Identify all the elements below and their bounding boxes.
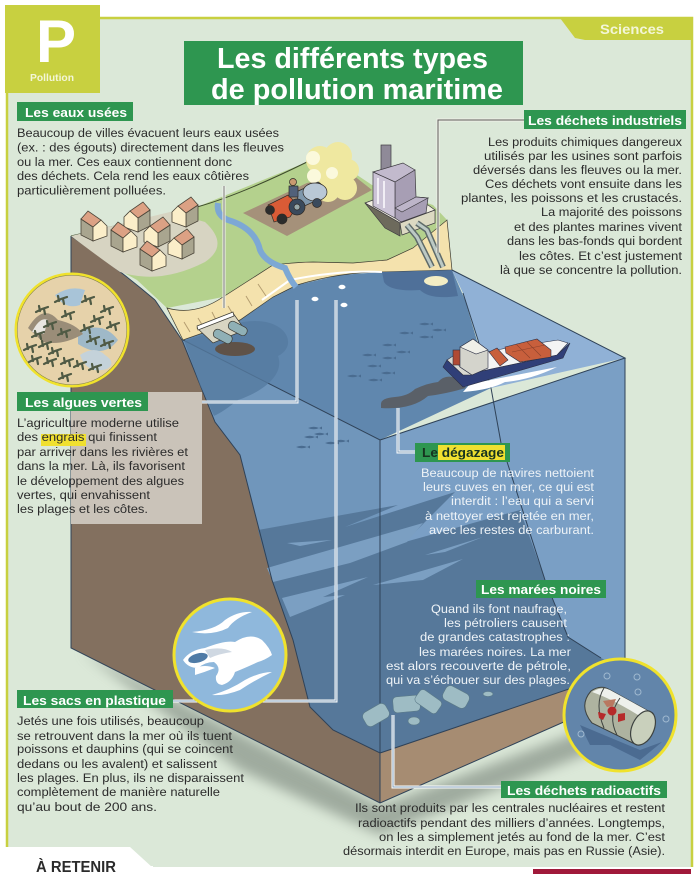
section: Les déchets radioactifs: Les déchets radioactifs <box>507 783 661 798</box>
outfall dark plume <box>184 321 288 416</box>
section: Les algues vertes: vertes, qui envahissent <box>17 488 151 502</box>
town ground <box>71 212 218 277</box>
floating trash <box>312 285 348 307</box>
circle: green algae on the beach <box>16 274 128 386</box>
deep dark water with streaks <box>258 492 625 753</box>
ship wake <box>463 367 557 392</box>
section: Les eaux usées: des déchets. Cela rend les eaux côtières <box>17 169 249 183</box>
section: Les déchets industriels: et des plantes marines vivent <box>514 220 683 234</box>
section: Les déchets industriels: là que se concentre la pollution. <box>500 263 682 277</box>
section: Les sacs en plastique: dedans ou les avalent) et salissent <box>17 757 218 771</box>
section: Les déchets industriels: plantes, les poissons et les crustacés. <box>461 191 682 205</box>
letter tab: P Pollution: P <box>36 8 76 75</box>
section: Les sacs en plastique: qu’au bout de 200 ans. <box>17 800 157 814</box>
shallow light water <box>452 270 625 388</box>
section: Les déchets industriels: Les produits chimiques dangereux <box>488 135 682 149</box>
spray cloud <box>306 142 359 202</box>
right water face <box>380 358 625 753</box>
section: Les eaux usées: Beaucoup de villes évacuent leurs eaux usées <box>17 126 279 140</box>
circle: radioactive barrel <box>564 659 676 771</box>
category tab: Sciences: Sciences <box>600 21 664 37</box>
section: Le dégazage: Beaucoup de navires nettoient <box>421 466 595 480</box>
section: Les sacs en plastique: Les sacs en plastique <box>23 693 166 708</box>
title: Les différents types <box>217 43 488 75</box>
section: Les algues vertes: des engrais qui finissent <box>17 430 158 444</box>
factory <box>365 145 435 236</box>
section: Le dégazage: Le dégazage <box>422 445 504 460</box>
section: Le dégazage <box>415 443 595 537</box>
section: Les déchets industriels: déversés dans les fleuves ou la mer. <box>473 163 682 177</box>
polluted water near factory <box>382 270 458 297</box>
title <box>184 41 523 106</box>
section: Les eaux usées <box>17 102 284 198</box>
section: Les déchets industriels: utilisés par les usines sont parfois <box>484 149 682 163</box>
section: Les déchets industriels: les côtes. Et c’est justement <box>519 249 683 263</box>
left brown earth face <box>71 236 380 803</box>
section: Les sacs en plastique: les plages. En plus, ils ne disparaissent <box>17 771 245 785</box>
section: Les déchets industriels: Les déchets industriels <box>528 113 682 128</box>
section: Le dégazage: avec les restes de carburant. <box>429 523 594 537</box>
section: Les déchets radioactifs: Ils sont produits par les centrales nucléaires et restent <box>355 801 666 815</box>
field <box>243 175 372 236</box>
section: Les eaux usées: Les eaux usées <box>25 105 127 120</box>
section: Les marées noires: les marées noires. La mer <box>419 645 571 659</box>
block edge lines <box>71 236 625 803</box>
section: Les déchets radioactifs <box>343 781 667 858</box>
category tab: Sciences <box>560 18 692 40</box>
section: Les marées noires: Les marées noires <box>481 582 601 597</box>
section: Les eaux usées: particulièrement polluées. <box>17 184 166 198</box>
houses <box>81 197 198 271</box>
section: Les algues vertes: dans la mer. Là, ils favorisent <box>17 459 186 473</box>
section: Le dégazage: leurs cuves en mer, ce qui est <box>423 480 595 494</box>
factory discharge pipes <box>407 223 448 286</box>
section: Les marées noires <box>386 580 606 687</box>
section: Les algues vertes: les plages et les côtes. <box>17 502 148 516</box>
river <box>218 203 296 287</box>
tractor <box>266 178 327 224</box>
section: Les marées noires: est alors recouverte de pétrole, <box>386 659 571 673</box>
section: Les déchets radioactifs: désormais interdit en Europe, mais pas en Russie (Asie). <box>343 844 665 858</box>
right brown seabed face <box>380 670 625 803</box>
block shadow on the background <box>80 650 610 835</box>
section: Les déchets industriels: dans les bas-fonds qui bordent <box>507 234 683 248</box>
section: Les déchets radioactifs: radioactifs pendant des milliers d’années. Longtemps, <box>358 816 665 830</box>
red footer box <box>533 869 691 874</box>
section: Les marées noires: qui va s’échouer sur des plages. <box>386 673 570 687</box>
circle: plastic bag <box>174 599 286 711</box>
section: Les eaux usées: ou la mer. Ces eaux contiennent donc <box>17 155 232 169</box>
section: Les marées noires: de grandes catastrophes : <box>420 630 570 644</box>
cliff ridges <box>184 284 266 332</box>
section: Le dégazage: à nettoyer est rejetée en mer, <box>425 509 594 523</box>
white foam strip along the shore <box>262 272 382 300</box>
section: Les déchets radioactifs: on les a simplement jetés au fond de la mer. C’est <box>379 830 666 844</box>
land top surface <box>71 162 447 308</box>
tab: À retenir <box>0 847 153 874</box>
section: Les sacs en plastique: poissons et dauphins (qui se coincent <box>17 742 234 756</box>
ship <box>443 339 570 392</box>
letter tab: P Pollution: Pollution <box>30 72 74 84</box>
ocean cross-section block <box>71 142 625 803</box>
section: Les déchets industriels <box>461 110 686 277</box>
sand beach <box>167 220 452 340</box>
front left water face <box>182 340 380 753</box>
land top outline <box>71 162 307 236</box>
sea floor barrels <box>361 684 493 728</box>
section: Les algues vertes: L’agriculture moderne utilise <box>17 416 179 430</box>
section: Les algues vertes: le développement des algues <box>17 474 184 488</box>
section: Les déchets industriels: La majorité des poissons <box>541 205 682 219</box>
section: Les marées noires: Quand ils font naufrage, <box>431 602 567 616</box>
section: Les sacs en plastique: Jetés une fois utilisés, beaucoup <box>17 714 204 728</box>
section: Les sacs en plastique: se retrouvent dans la mer où ils tuent <box>17 729 233 743</box>
beige panel behind algae text <box>71 392 202 524</box>
section: Les marées noires: les pétroliers causent <box>444 616 568 630</box>
section: Les déchets industriels: Ces déchets vont ensuite dans les <box>485 177 682 191</box>
section: Les algues vertes: par arriver dans les rivières et <box>17 445 189 459</box>
sea surface <box>183 270 491 440</box>
section: Les algues vertes <box>17 392 189 516</box>
section: Les sacs en plastique <box>17 690 245 814</box>
section: Les algues vertes: Les algues vertes <box>25 395 142 410</box>
oil trail <box>381 377 466 408</box>
section: Les sacs en plastique: complètement de manière naturelle <box>17 785 220 799</box>
letter tab: P Pollution <box>5 5 100 93</box>
title: de pollution maritime <box>211 74 503 106</box>
fish shoals <box>296 322 446 448</box>
connector lines <box>173 120 524 787</box>
section: Les eaux usées: (ex. : des égouts) directement dans les fleuves <box>17 140 284 154</box>
section: Le dégazage: interdit : l’eau qui a servi <box>451 494 594 508</box>
sewage outlet <box>197 312 255 356</box>
